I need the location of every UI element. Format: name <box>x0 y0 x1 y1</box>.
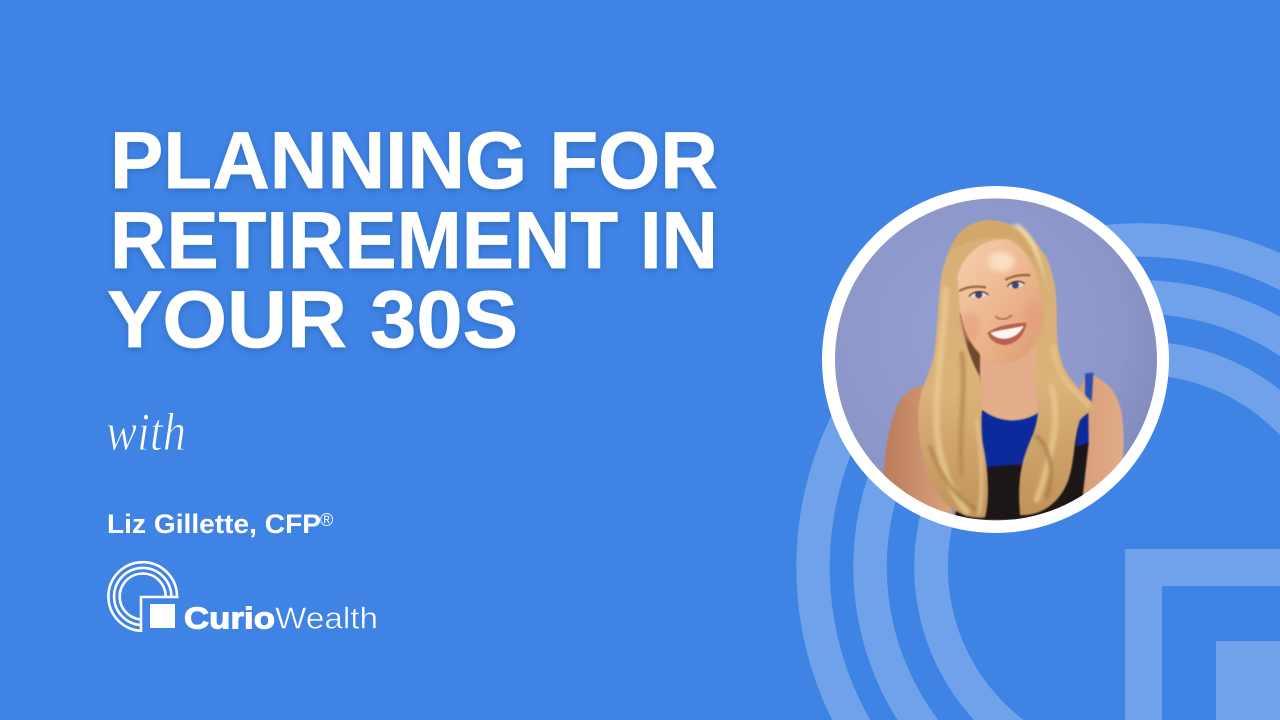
eyes <box>969 281 1025 298</box>
eyebrows <box>960 275 1029 291</box>
nose <box>996 315 1012 319</box>
title <box>107 116 718 365</box>
presenter name: Liz Gillette, CFP <box>107 509 321 539</box>
smile <box>987 323 1027 345</box>
title: RETIREMENT IN <box>110 196 718 286</box>
logo wordmark: Curio: Curio <box>184 600 275 636</box>
presenter name: ® <box>320 510 333 530</box>
neck and chest <box>980 347 1038 423</box>
logo wordmark: Wealth: Wealth <box>275 600 378 636</box>
company logo: CurioWealth <box>108 562 378 636</box>
arms <box>882 373 1124 520</box>
script word: with: with <box>106 403 186 463</box>
hair strands <box>930 290 1088 513</box>
sleeveless top <box>953 373 1093 520</box>
portrait: illustrated photo of presenter <box>835 198 1157 520</box>
portrait backdrop <box>835 198 1157 520</box>
shadow beside neck <box>959 313 981 380</box>
decorative logo mark: concentric rings and square <box>796 223 1280 720</box>
logo icon <box>108 562 178 632</box>
title: PLANNING FOR <box>110 116 718 206</box>
hair parting over forehead <box>950 221 1044 287</box>
long blonde hair: left lock <box>918 267 988 518</box>
title: YOUR 30S <box>107 275 518 365</box>
long blonde hair: right lock <box>1019 253 1097 515</box>
face <box>950 221 1045 364</box>
portrait: white circular frame <box>822 186 1169 533</box>
hair behind the head <box>934 220 1064 367</box>
